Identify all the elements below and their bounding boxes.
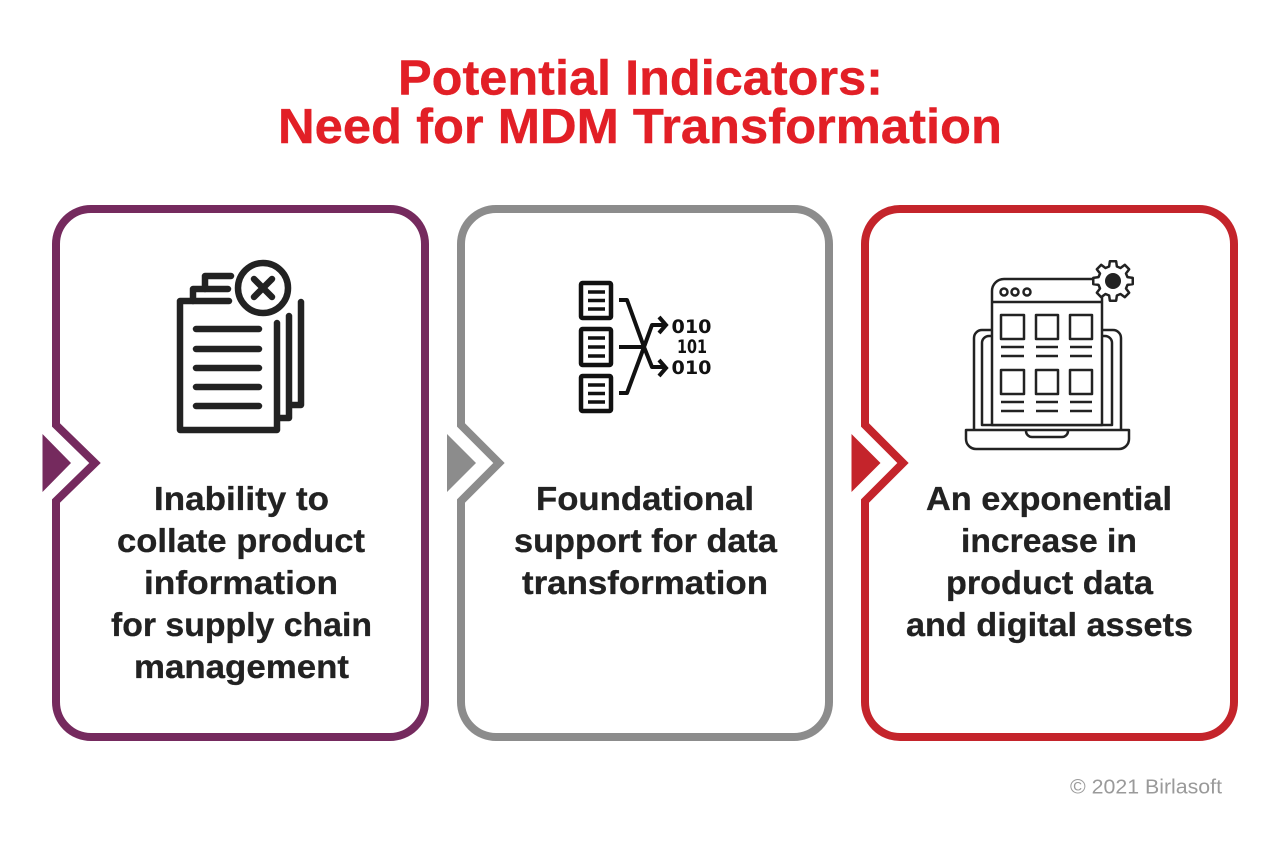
panel 1 text: management xyxy=(134,648,349,685)
icon: documents to binary data: 010 xyxy=(672,316,712,338)
panel 3 text: increase in xyxy=(961,522,1137,559)
panel 3 text xyxy=(906,480,1193,643)
copyright footer: © 2021 Birlasoft xyxy=(1070,776,1222,798)
icon: documents with error mark xyxy=(180,263,301,430)
panel 2 outline xyxy=(461,209,829,737)
panel 1 text xyxy=(111,480,372,685)
panel 1 text: Inability to xyxy=(154,480,329,517)
title: Need for MDM Transformation xyxy=(278,100,1002,154)
panel 3 outline xyxy=(865,209,1234,737)
icon: documents to binary data: 101 xyxy=(677,336,707,358)
panel 2 text: transformation xyxy=(522,564,768,601)
panel 3 text: An exponential xyxy=(926,480,1172,517)
panel 2 text: Foundational xyxy=(536,480,754,517)
panel: exponential increase xyxy=(852,209,1234,737)
panel 2 text xyxy=(514,480,778,601)
panel: inability to collate xyxy=(42,209,425,737)
panel 1 text: collate product xyxy=(117,522,365,559)
panel 1 outline xyxy=(56,209,425,737)
panel 1 text: for supply chain xyxy=(111,606,372,643)
panel 3 text: and digital assets xyxy=(906,606,1193,643)
panel 1 text: information xyxy=(144,564,338,601)
icon: documents to binary data: 010 xyxy=(672,357,712,379)
panel 1 arrow marker xyxy=(42,434,71,492)
panel 2 arrow marker xyxy=(447,434,476,492)
panel 3 arrow marker xyxy=(852,434,880,492)
title: Potential Indicators: xyxy=(398,52,883,106)
icon: documents to binary data xyxy=(581,283,712,411)
panel 3 text: product data xyxy=(946,564,1154,601)
panel: foundational support xyxy=(447,209,829,737)
title xyxy=(278,52,1002,154)
icon: laptop with app window and gear xyxy=(966,261,1133,449)
panel 2 text: support for data xyxy=(514,522,778,559)
